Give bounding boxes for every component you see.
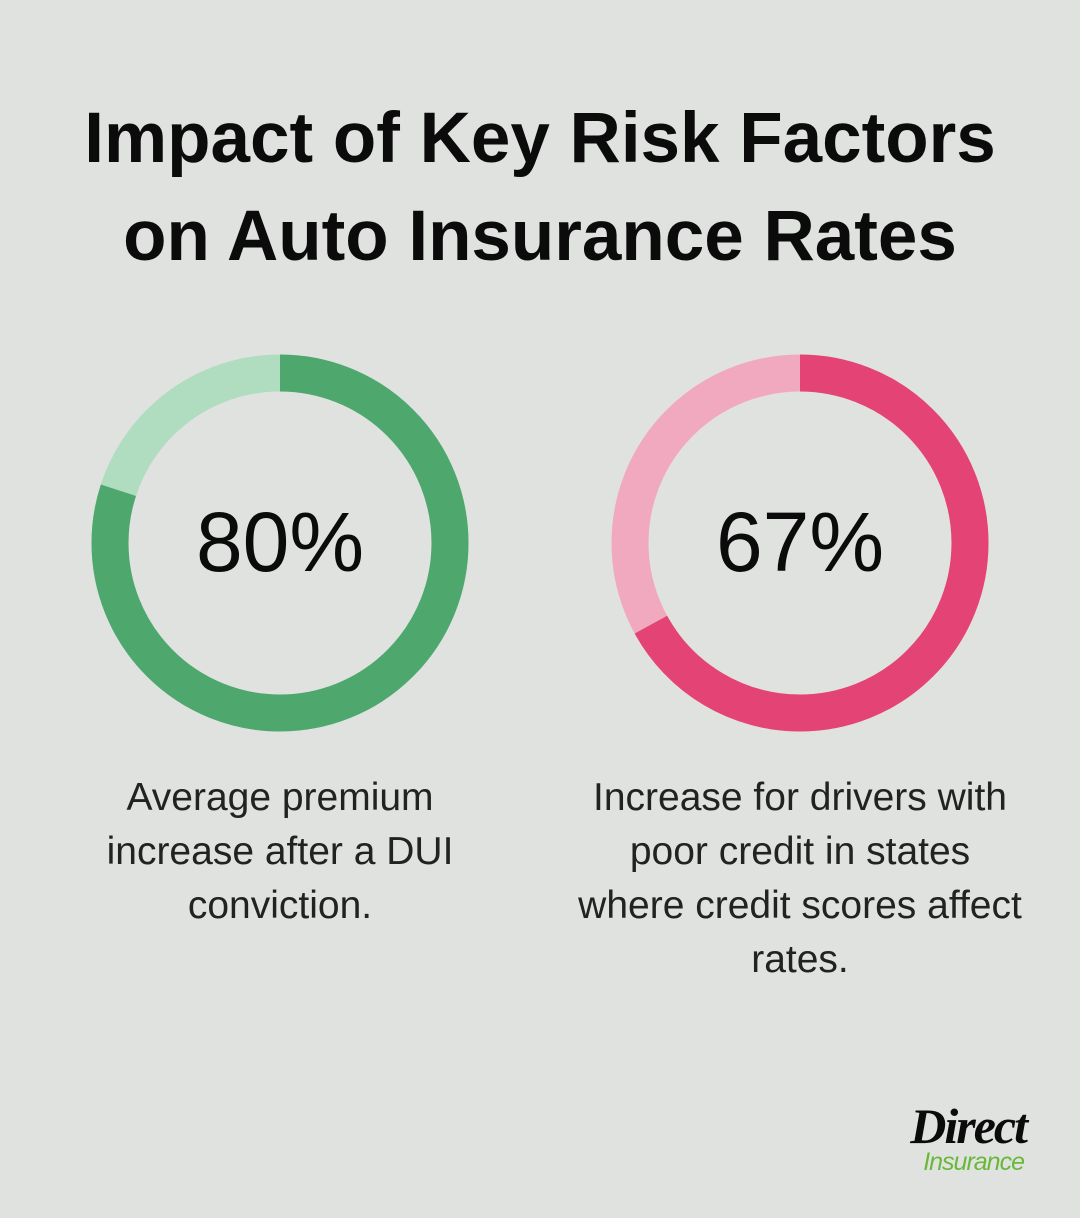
- caption: DUI: Average premium: [126, 776, 434, 819]
- logo: Insurance: [923, 1148, 1024, 1176]
- title: on Auto Insurance Rates: [123, 197, 957, 276]
- donut: 80%: [92, 354, 468, 732]
- caption: credit: rates.: [751, 938, 849, 981]
- caption: DUI: increase after a DUI: [107, 830, 453, 873]
- caption: credit: Increase for drivers with: [593, 776, 1007, 819]
- logo: Direct: [910, 1098, 1026, 1154]
- caption: credit: where credit scores affect: [578, 884, 1022, 927]
- title: Impact of Key Risk Factors: [84, 99, 996, 178]
- caption: credit: [578, 776, 1022, 981]
- caption: credit: poor credit in states: [630, 830, 970, 873]
- caption: DUI: conviction.: [188, 884, 372, 927]
- caption: DUI: [107, 776, 453, 927]
- donut: 67%: [612, 354, 988, 732]
- title: [84, 99, 996, 276]
- donut: 67%: 67%: [716, 495, 884, 589]
- logo: [910, 1098, 1030, 1176]
- donut: 80%: 80%: [196, 495, 364, 589]
